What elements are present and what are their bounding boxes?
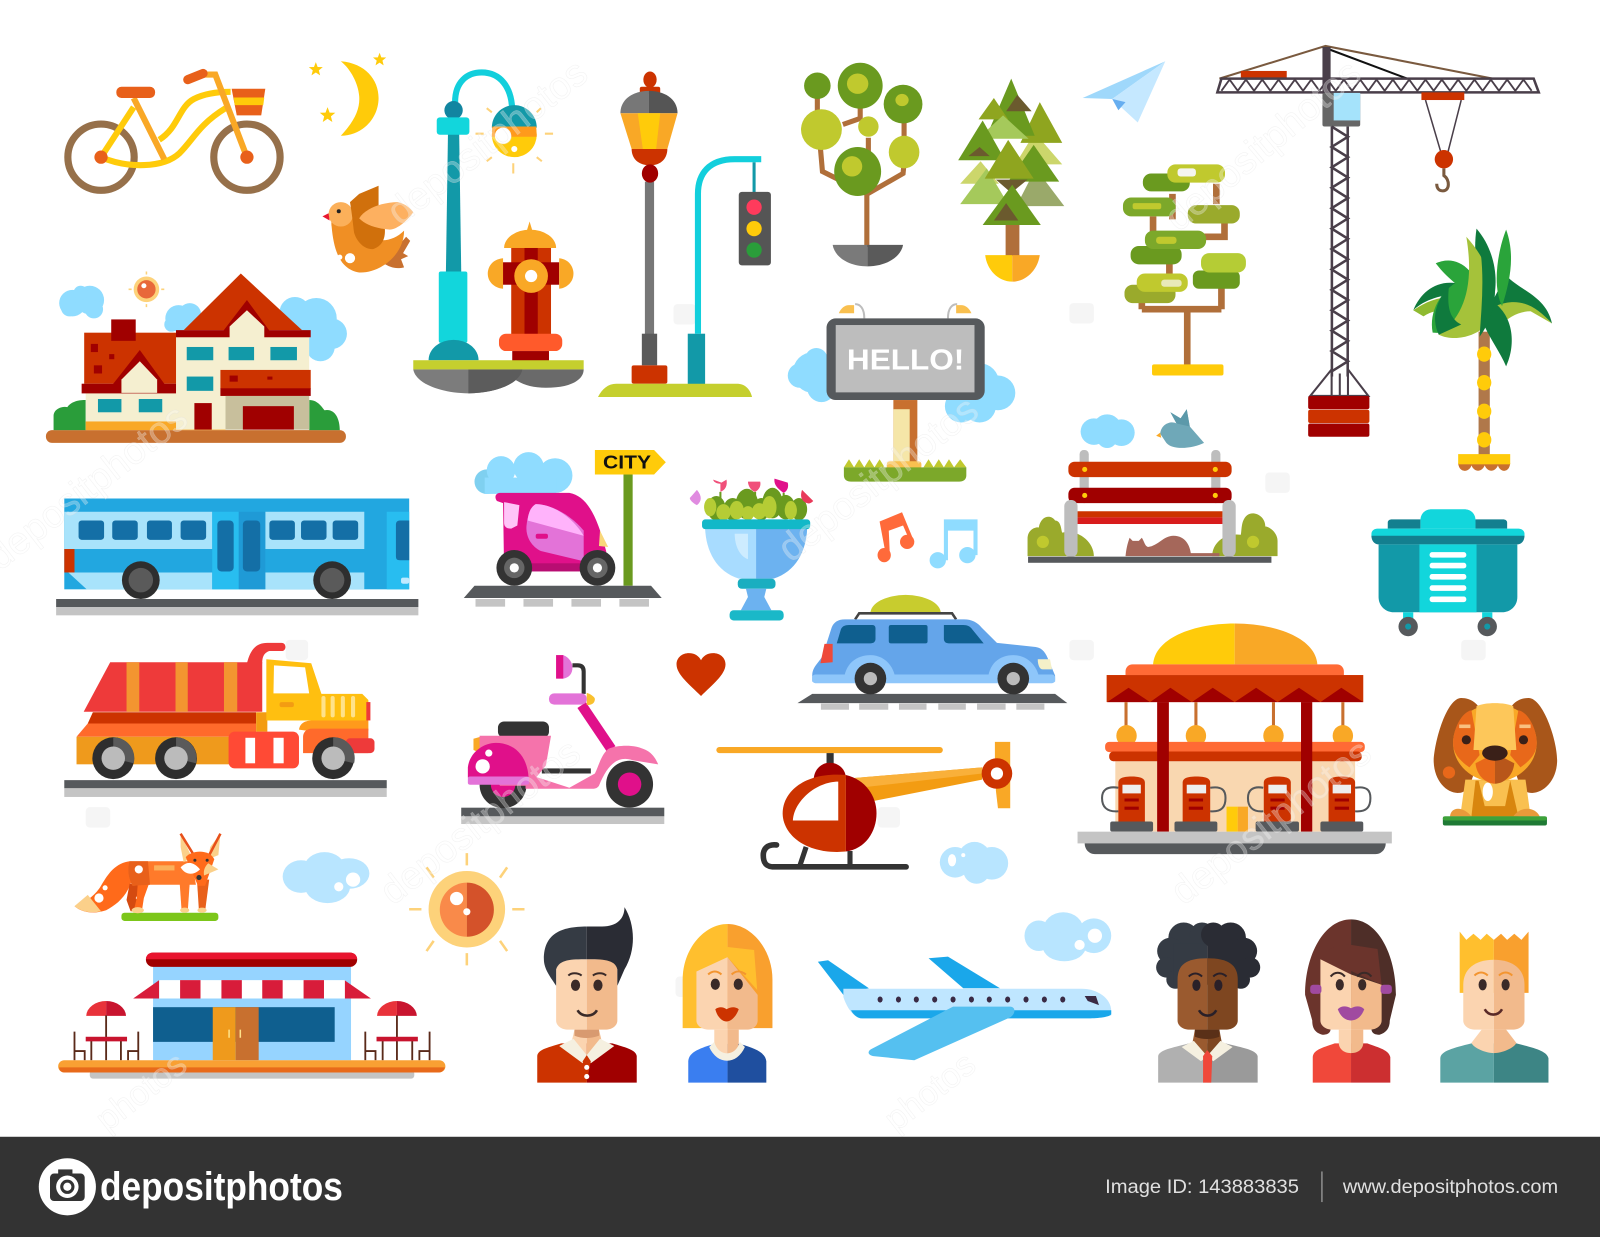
clouds behind house <box>59 286 347 361</box>
icon: tower crane <box>1217 46 1539 437</box>
icon: fire hydrant <box>488 221 573 361</box>
tail <box>74 861 133 912</box>
icon: cloud-leaf tree <box>1123 164 1246 376</box>
icon: grass platform with rocks <box>413 360 584 393</box>
watermarks: depositphotos <box>379 51 596 234</box>
hanging lamps <box>1116 702 1353 746</box>
icon: old street lantern <box>620 71 678 384</box>
icon: palm tree <box>1413 229 1552 471</box>
icon: round-leaf tree <box>801 63 922 266</box>
icon: street lamp with sun ball <box>429 72 553 360</box>
icon: cloud above airplane <box>1024 912 1111 961</box>
icon: dump truck <box>64 643 387 797</box>
website: www.depositphotos.com <box>1342 1176 1558 1198</box>
billboard text: HELLO! <box>847 344 964 376</box>
icon: paper plane <box>1083 61 1165 122</box>
watermarks: depositphotos <box>372 731 589 913</box>
footer bar <box>0 1137 1600 1237</box>
CITY label: CITY <box>603 451 651 472</box>
icon: sun <box>409 853 524 965</box>
icon: cloud left of sun <box>283 852 369 903</box>
icon: blue station wagon <box>797 595 1067 710</box>
head <box>181 834 192 862</box>
icon: pink city car and CITY sign <box>464 450 666 607</box>
person: man with quiff <box>537 907 637 1083</box>
person: brunette woman <box>1305 919 1396 1083</box>
icon: orange bird <box>322 186 413 273</box>
icon: airplane <box>818 957 1111 1060</box>
icon: dog <box>1434 698 1557 826</box>
clouds behind billboard <box>788 348 1015 422</box>
person: blonde woman <box>683 924 772 1083</box>
icon: flower vase <box>690 479 813 620</box>
icon: helicopter <box>716 742 1012 867</box>
icon: traffic light <box>688 159 771 385</box>
fuel pumps <box>1102 777 1370 832</box>
icon: teal dumpster <box>1371 509 1524 636</box>
watermarks: depositphotos <box>1163 731 1379 913</box>
icon: cloud near helicopter <box>940 842 1008 884</box>
icon: pine tree <box>958 79 1064 282</box>
logo wordmark: depositphotos <box>100 1165 343 1209</box>
icon: music notes <box>878 512 978 568</box>
icon: house with clouds <box>46 271 347 443</box>
icon: small blue bird <box>1156 409 1204 448</box>
icon: grass strip under lantern <box>598 384 752 397</box>
icon: park bench <box>1028 450 1278 563</box>
watermarks: depositphotos <box>1157 51 1369 240</box>
icon: restaurant <box>58 953 445 1079</box>
person: man with blond crown hair <box>1440 932 1548 1083</box>
person: man with afro <box>1156 922 1260 1083</box>
watermarks: photos <box>877 1045 983 1139</box>
watermarks <box>0 51 1379 1139</box>
icon: bicycle <box>68 74 280 190</box>
icon: cloud above pink car <box>474 452 572 494</box>
watermarks: depositphotos <box>770 388 987 570</box>
icon: gas station <box>1078 624 1392 854</box>
image id: Image ID: 143883835 <box>1105 1176 1299 1198</box>
cat under bench <box>1126 536 1219 556</box>
logo: camera badge <box>39 1158 96 1215</box>
right terrace table <box>365 1001 430 1060</box>
left terrace table <box>74 1001 138 1060</box>
icon: cloud above bench <box>1081 414 1135 448</box>
icon: billboard HELLO <box>788 304 1015 482</box>
icon: pink scooter <box>461 655 664 824</box>
icon: blue city bus <box>56 499 418 615</box>
icon: heart <box>677 653 726 696</box>
body <box>128 861 196 886</box>
faint camera watermarks <box>86 303 1486 997</box>
icon: fox <box>74 834 220 921</box>
legs <box>127 884 145 911</box>
watermarks: photos <box>89 1045 194 1139</box>
icon: moon and stars <box>309 53 386 136</box>
